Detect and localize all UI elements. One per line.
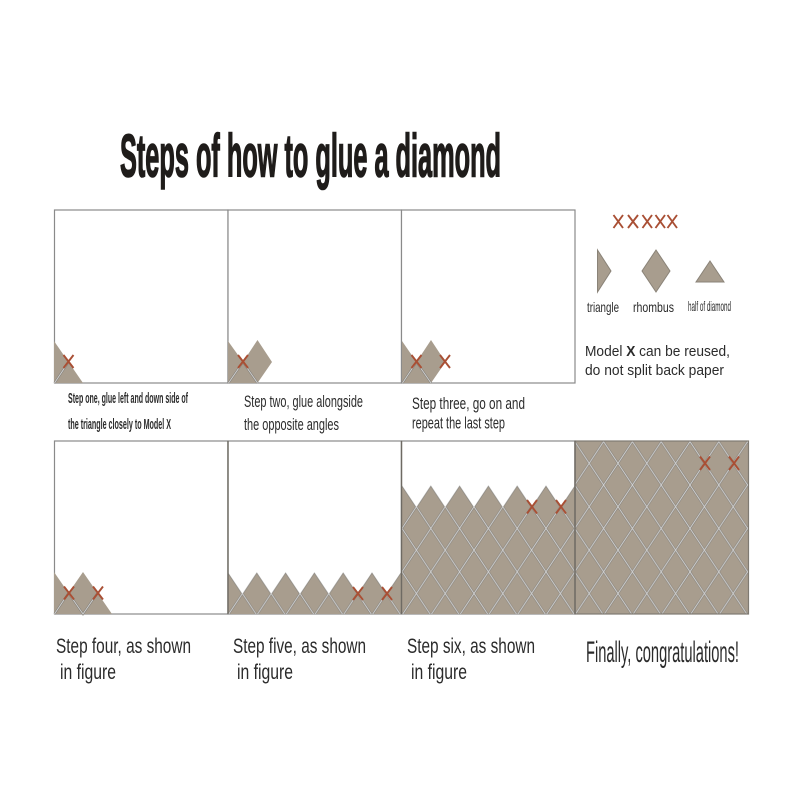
- infographic: steps of how to glue a diamond: half of diamond: [688, 298, 731, 314]
- caption: step one: the triangle closely to Model X: [68, 416, 171, 433]
- model X marker 2: [93, 586, 103, 600]
- model X marker 2: [556, 500, 566, 514]
- legend note: do not split back paper: [585, 363, 724, 379]
- caption: step five: Step five, as shown: [233, 635, 366, 658]
- triangle and half diamond pieces: [54, 341, 83, 383]
- panel: step six: [402, 441, 575, 614]
- caption: step three: Step three, go on and: [412, 395, 525, 413]
- caption: step one: [68, 390, 188, 433]
- triangle, half diamond and rhombus pieces: [402, 340, 446, 383]
- model X marker 2: [382, 587, 392, 600]
- panel: finished wall: [575, 441, 748, 614]
- legend note: Model X can be reused,: [585, 344, 730, 360]
- caption: step three: [412, 395, 525, 432]
- model X marker: [238, 355, 248, 368]
- panel: step four: [54, 441, 228, 614]
- caption: step two: [244, 393, 363, 434]
- infographic: steps of how to glue a diamond: Step one, glue left and down side of: [68, 390, 188, 407]
- panel: step five: [228, 441, 402, 614]
- legend: rhombus: [633, 250, 674, 315]
- caption: step two: Step two, glue alongside: [244, 393, 363, 411]
- triangle, half diamond and rhombus pieces: [54, 572, 112, 614]
- legend note: [585, 344, 730, 379]
- caption: step six: in figure: [411, 661, 467, 684]
- model X marker 1: [64, 586, 74, 600]
- panel: step three: [402, 210, 575, 383]
- legend: model X markers: [614, 215, 677, 228]
- model X marker 1: [412, 355, 422, 368]
- panel: step one: [54, 210, 228, 383]
- model X marker 1: [527, 500, 537, 514]
- caption: step four: Step four, as shown: [56, 635, 191, 658]
- triangle, half diamond and rhombus pieces: [228, 340, 272, 383]
- caption: step four: in figure: [60, 661, 116, 684]
- rows of diamonds: [402, 485, 575, 614]
- legend: half of diamond: [688, 261, 731, 314]
- bottom row of diamonds: [228, 572, 401, 614]
- caption: step five: [233, 635, 366, 684]
- model X marker 2: [440, 355, 450, 368]
- caption: step six: Step six, as shown: [407, 635, 535, 658]
- model X marker 1: [353, 587, 363, 600]
- panel: step two: [228, 210, 402, 383]
- model X marker 2: [729, 456, 739, 470]
- legend: triangle: triangle: [587, 299, 619, 315]
- legend: rhombus: rhombus: [633, 299, 674, 315]
- caption: step two: the opposite angles: [244, 416, 339, 434]
- model X marker: [64, 355, 74, 368]
- caption: step three: repeat the last step: [412, 414, 505, 432]
- caption: step four: [56, 635, 191, 684]
- caption: step six: [407, 635, 535, 684]
- model X marker 1: [700, 456, 710, 470]
- caption: step five: in figure: [237, 661, 293, 684]
- legend: triangle: [587, 250, 619, 315]
- panel dividers: [228, 441, 575, 614]
